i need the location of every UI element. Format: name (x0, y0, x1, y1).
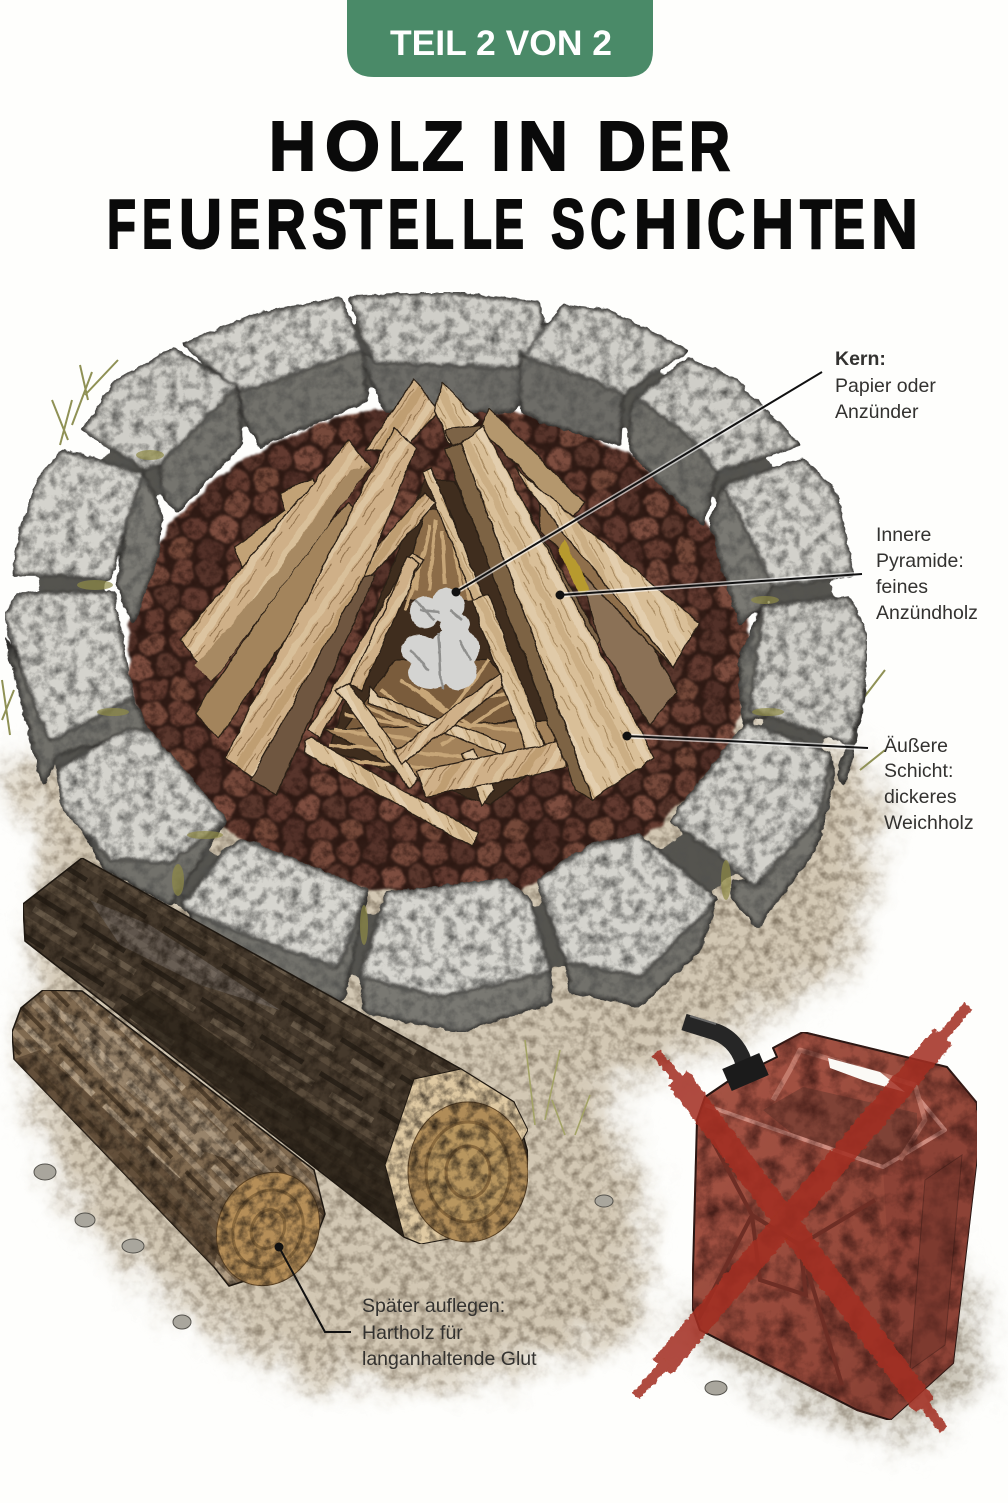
callout: aeussere Schicht: Weichholz (884, 812, 974, 834)
stone 5 (5, 592, 147, 785)
title: D (597, 107, 646, 185)
hardwood logs (12, 858, 528, 1303)
title: U (179, 185, 222, 263)
paper core (401, 589, 479, 690)
callout: aeussere Schicht: Schicht: (884, 760, 953, 782)
title: S (551, 185, 585, 263)
title: T (800, 185, 832, 263)
leader: aeussere Schicht (622, 732, 868, 748)
title: E (229, 185, 260, 263)
ring backing seams (63, 350, 807, 950)
callout: Hartholz: Hartholz für (362, 1322, 463, 1344)
callout: Hartholz: Später auflegen: (362, 1295, 505, 1317)
callout: Hartholz: langanhaltende Glut (362, 1348, 537, 1370)
title: T (350, 185, 382, 263)
title: S (312, 185, 347, 263)
stone 10 (670, 722, 833, 928)
title (107, 107, 918, 263)
stone 8 (360, 880, 552, 1032)
stone 3 (83, 348, 242, 512)
callout: Kern: Anzünder (835, 401, 919, 423)
header tab (347, 0, 653, 77)
stone 14 (520, 305, 687, 445)
back log (23, 858, 528, 1244)
red cross (636, 1006, 968, 1430)
title: L (462, 185, 492, 263)
stone 13 (630, 358, 800, 525)
stone blocks (5, 292, 867, 1032)
title: E (650, 107, 684, 185)
title: L (389, 107, 419, 185)
spout (684, 1016, 764, 1080)
kindling fine pile (325, 480, 565, 805)
canister side panel (910, 1155, 962, 1370)
title: N (871, 185, 918, 263)
title: L (424, 185, 454, 263)
callout: aeussere Schicht: dickeres (884, 786, 957, 808)
moss (77, 450, 784, 945)
title: E (142, 185, 172, 263)
header tab: TEIL 2 VON 2 (390, 24, 612, 63)
title: R (266, 185, 306, 263)
title: I (491, 107, 511, 185)
title: E (833, 185, 865, 263)
callout: Kern: Papier oder (835, 375, 936, 397)
pebbles (34, 1164, 727, 1395)
stone 4 (13, 450, 162, 623)
front log (12, 990, 338, 1303)
title: N (518, 107, 568, 185)
lower crossed sticks (304, 683, 506, 847)
leader: Kern (452, 372, 822, 596)
title: C (590, 185, 626, 263)
callout: innere Pyramide: feines (876, 576, 928, 598)
stone 1 (350, 292, 545, 412)
leader lines (274, 372, 868, 1332)
fire pit ring (2, 292, 885, 1032)
gravel bed (128, 405, 752, 895)
title: H (751, 185, 794, 263)
callout: aeussere Schicht: Äußere (884, 735, 948, 757)
callout: Kern: Kern: (835, 348, 886, 370)
right logs (445, 425, 699, 800)
callout: innere Pyramide: Pyramide: (876, 550, 964, 572)
grass near logs (525, 1040, 590, 1135)
wood pyramid (180, 380, 699, 847)
title: H (634, 185, 677, 263)
title: E (388, 185, 419, 263)
leader: innere Pyramide (556, 574, 862, 600)
callout: innere Pyramide: Innere (876, 524, 931, 546)
title: O (325, 107, 380, 185)
inner sticks (423, 468, 545, 751)
stone 2 (183, 298, 367, 446)
title: R (689, 107, 730, 185)
stone 7 (182, 840, 368, 1002)
title: I (684, 185, 703, 263)
grass tufts (2, 360, 885, 770)
callout: innere Pyramide: Anzündholz (876, 602, 978, 624)
canister body (692, 1032, 977, 1420)
canister handle opening (828, 1058, 905, 1092)
title: H (269, 107, 316, 185)
leader: Hartholz (274, 1242, 351, 1332)
title: Z (422, 107, 464, 185)
left logs (180, 428, 416, 795)
stone 6 (57, 730, 226, 905)
back logs (195, 380, 677, 738)
stone 9 (537, 835, 717, 1006)
title: C (707, 185, 745, 263)
ground: dirt patch (0, 700, 975, 1440)
stone 12 (710, 459, 853, 624)
canister embossed cross (698, 1140, 875, 1385)
title: E (494, 185, 524, 263)
title: F (107, 185, 136, 263)
stone 11 (740, 597, 867, 785)
icon: fuel canister (636, 1006, 977, 1430)
